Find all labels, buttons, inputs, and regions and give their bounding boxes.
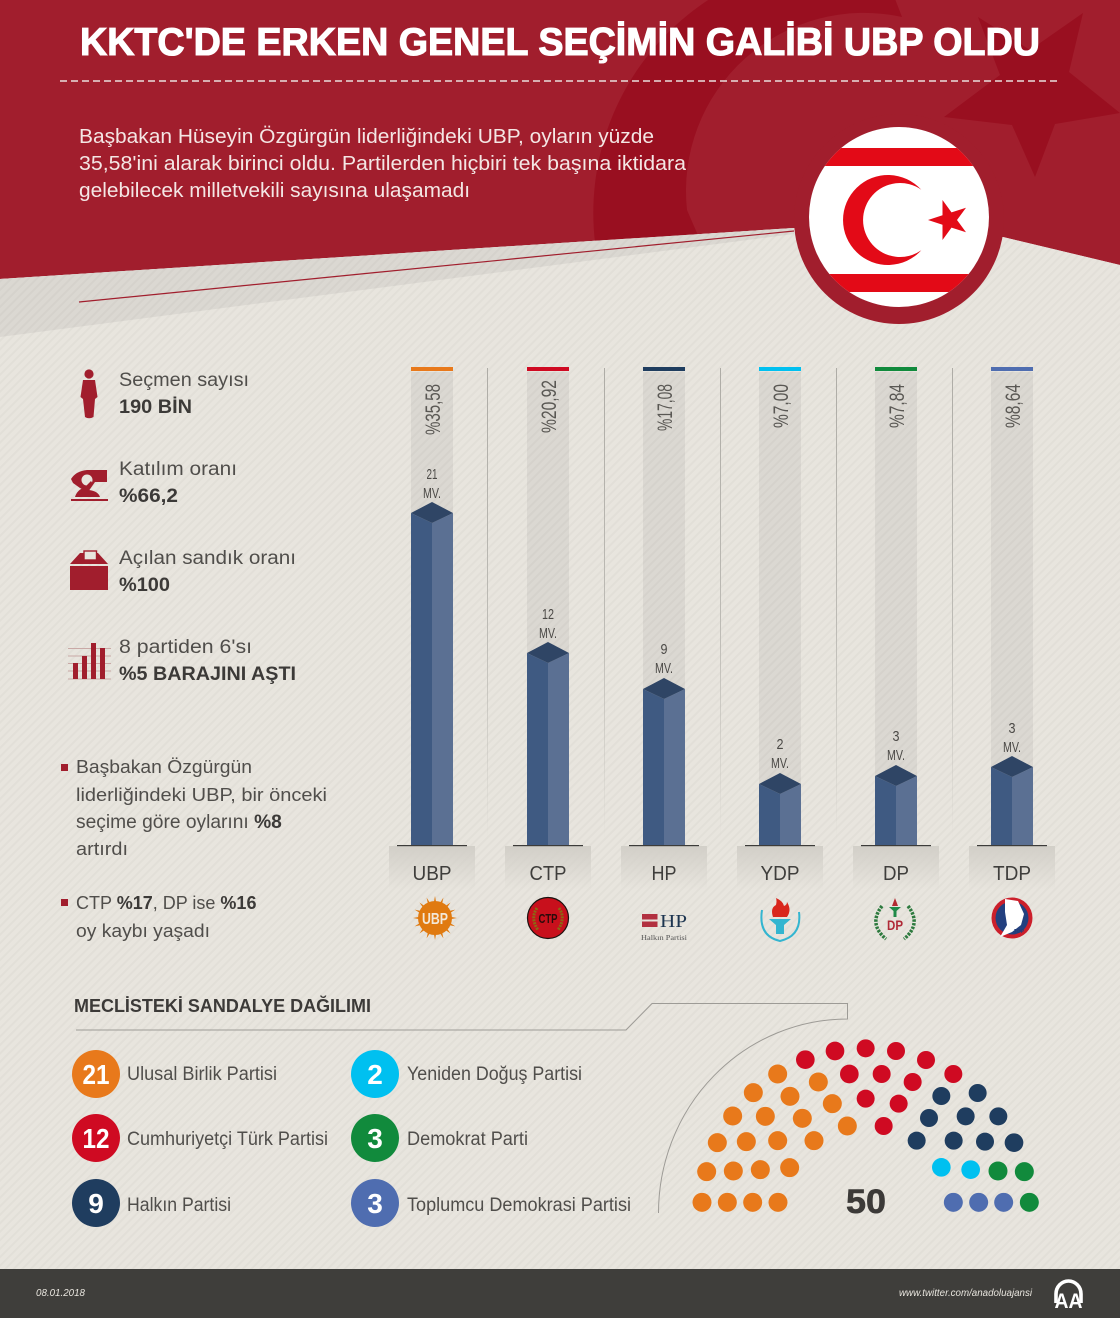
- bar: TDP: 3: [1008, 720, 1016, 737]
- note: UBP vote gain: seçime göre oylarını %8: [76, 812, 282, 833]
- grey ground cut-out under the banner: [0, 228, 1120, 340]
- title: KKTC'DE ERKEN GENEL SEÇİMİN GALİBİ UBP OLDU: [80, 21, 1040, 64]
- party label: DP: DP: [883, 863, 909, 885]
- logo: TDP: TDP: [1014, 929, 1025, 935]
- stat: ballot boxes: Açılan sandık oranı: [119, 548, 296, 569]
- seat section heading: MECLİSTEKİ SANDALYE DAĞILIMI: [74, 995, 371, 1016]
- flag medallion: [794, 114, 1004, 324]
- stat: turnout: %66,2: [119, 486, 178, 507]
- stat: ballot boxes: [70, 548, 296, 596]
- bar: CTP: [527, 367, 569, 845]
- bar: YDP: %7,00: [770, 384, 793, 428]
- bar: DP: 3: [892, 728, 900, 745]
- bar: UBP: 21: [426, 466, 438, 483]
- bar: CTP: %20,92: [538, 380, 561, 433]
- seats: TDP: [944, 1193, 1013, 1212]
- legend: Halkın Partisi: [72, 1179, 231, 1227]
- legend: Cumhuriyetçi Türk Partisi: 12: [82, 1123, 110, 1154]
- bar: DP: [875, 367, 917, 845]
- logo: TDP: [992, 898, 1032, 938]
- bar: UBP: MV.: [423, 485, 441, 502]
- stat: threshold: 8 partiden 6'sı: [119, 637, 252, 658]
- logo: HP: HP: [660, 911, 687, 931]
- seats: YDP: [932, 1158, 980, 1179]
- stat: turnout: Katılım oranı: [119, 459, 237, 480]
- header banner: [0, 0, 1120, 279]
- seat chart: [692, 1039, 1039, 1212]
- legend: Demokrat Parti: Demokrat Parti: [407, 1129, 528, 1150]
- seats: HP: [908, 1084, 1023, 1152]
- seats: CTP: [796, 1039, 962, 1135]
- note: CTP and DP vote loss: oy kaybı yaşadı: [76, 920, 210, 941]
- note: UBP vote gain: artırdı: [76, 838, 128, 859]
- intro paragraph: 35,58'ini alarak birinci oldu. Partilerden hiçbiri tek başına iktidara: [79, 153, 687, 175]
- logo: DP: DP: [887, 917, 903, 933]
- party label: YDP: [737, 845, 823, 890]
- note: CTP and DP vote loss: CTP %17, DP ise %16: [76, 893, 256, 913]
- logo: UBP: [413, 896, 457, 940]
- background star: [944, 13, 1120, 177]
- party label: TDP: [969, 845, 1055, 890]
- icon: voting hand: [71, 470, 108, 501]
- bar: DP: MV.: [887, 747, 905, 764]
- logo: DP: [876, 898, 914, 939]
- bar: CTP: 12: [542, 606, 554, 623]
- bar: TDP: %8,64: [1002, 384, 1025, 428]
- intro paragraph: Başbakan Hüseyin Özgürgün liderliğindeki UBP, oyların yüzde: [79, 126, 654, 148]
- stat: turnout: [71, 459, 237, 507]
- party label: UBP: [389, 845, 475, 890]
- bar: DP: %7,84: [886, 384, 909, 428]
- stat: voters: 190 BİN: [119, 397, 192, 418]
- logo: HP: Halkın Partisi: [641, 933, 687, 942]
- legend: Yeniden Doğuş Partisi: [351, 1050, 582, 1098]
- date: 08.01.2018: [36, 1288, 85, 1299]
- icon: person: [80, 369, 98, 418]
- legend: Demokrat Parti: 3: [367, 1123, 383, 1154]
- stat: threshold: %5 BARAJINI AŞTI: [119, 664, 296, 685]
- legend: Toplumcu Demokrasi Partisi: Toplumcu Demokrasi Partisi: [407, 1195, 631, 1216]
- bar: TDP: MV.: [1003, 739, 1021, 756]
- logo: CTP: CTP: [538, 911, 558, 926]
- bar: YDP: MV.: [771, 755, 789, 772]
- shaded sliver: [0, 228, 794, 337]
- bar: HP: [643, 367, 685, 845]
- column separators: [487, 368, 953, 840]
- stat: voters: Seçmen sayısı: [119, 370, 249, 391]
- bar: HP: 9: [660, 641, 668, 658]
- party label: HP: HP: [652, 863, 676, 885]
- note: UBP vote gain: [61, 756, 327, 859]
- icon: ballot box: [70, 551, 108, 590]
- bar: HP: %17,08: [654, 384, 677, 431]
- stat: ballot boxes: %100: [119, 575, 170, 596]
- legend: Demokrat Parti: [351, 1114, 528, 1162]
- icon: AA logo: [1054, 1281, 1082, 1313]
- logo: UBP: UBP: [422, 911, 448, 928]
- heading rule and hemicycle arc: [76, 1004, 848, 1213]
- legend: Yeniden Doğuş Partisi: Yeniden Doğuş Partisi: [407, 1064, 582, 1085]
- seat total: 50: [846, 1183, 886, 1221]
- legend: Toplumcu Demokrasi Partisi: 3: [367, 1188, 383, 1219]
- bar: YDP: 2: [776, 736, 784, 753]
- sliver red line: [79, 231, 794, 302]
- stat: voters: [80, 369, 249, 418]
- icon: AA logo: AA: [1054, 1290, 1082, 1313]
- bar: CTP: MV.: [539, 625, 557, 642]
- legend: Yeniden Doğuş Partisi: 2: [367, 1059, 383, 1090]
- bar: UBP: [411, 367, 453, 845]
- bar: TDP: [991, 367, 1033, 845]
- legend: Halkın Partisi: Halkın Partisi: [127, 1195, 231, 1216]
- background crescent: [593, 0, 902, 250]
- intro paragraph: gelebilecek milletvekili sayısına ulaşamadı: [79, 180, 470, 202]
- party label: CTP: CTP: [530, 863, 566, 885]
- party label: CTP: [505, 845, 591, 890]
- party label: TDP: TDP: [993, 863, 1031, 885]
- party label: DP: [853, 845, 939, 890]
- intro paragraph: [79, 126, 687, 202]
- stat: threshold: [68, 637, 296, 685]
- seats: DP: [988, 1161, 1039, 1212]
- bar: HP: MV.: [655, 660, 673, 677]
- legend: Ulusal Birlik Partisi: 21: [82, 1059, 110, 1090]
- note: UBP vote gain: Başbakan Özgürgün: [76, 756, 252, 777]
- party label: YDP: YDP: [760, 863, 800, 885]
- footer: [0, 1269, 1120, 1318]
- icon: bar chart: [68, 643, 111, 679]
- logo: CTP: [528, 898, 568, 938]
- source url: www.twitter.com/anadoluajansi: [899, 1288, 1033, 1299]
- legend: Halkın Partisi: 9: [88, 1188, 104, 1219]
- note: UBP vote gain: liderliğindeki UBP, bir önceki: [76, 784, 327, 805]
- bar: YDP: [759, 367, 801, 845]
- legend: Ulusal Birlik Partisi: [72, 1050, 277, 1098]
- note: CTP and DP vote loss: [61, 893, 256, 941]
- legend: Ulusal Birlik Partisi: Ulusal Birlik Partisi: [127, 1064, 277, 1085]
- bar: UBP: %35,58: [422, 384, 445, 435]
- logo: YDP: [761, 898, 799, 941]
- legend: Cumhuriyetçi Türk Partisi: Cumhuriyetçi Türk Partisi: [127, 1129, 328, 1150]
- party label: UBP: UBP: [412, 863, 452, 885]
- seats: UBP: [692, 1064, 857, 1212]
- party label: HP: [621, 845, 707, 890]
- legend: Toplumcu Demokrasi Partisi: [351, 1179, 631, 1227]
- logo: HP: [641, 911, 687, 942]
- legend: Cumhuriyetçi Türk Partisi: [72, 1114, 328, 1162]
